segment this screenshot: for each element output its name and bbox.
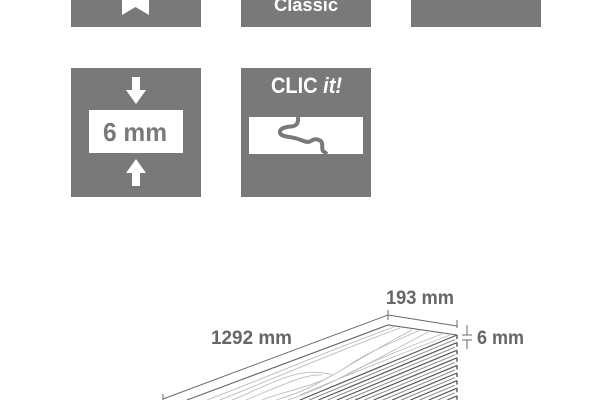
label: 6 mm: 6 mm [477, 328, 524, 349]
dimension: width line [388, 310, 457, 328]
icon: bookmark tile [71, 0, 201, 27]
label: 1292 mm: 1292 mm [211, 328, 292, 349]
plank dimension drawing [163, 288, 524, 400]
dimension: length line [163, 315, 388, 400]
label: 193 mm: 193 mm [386, 288, 454, 309]
icon: CLIC it tile [241, 68, 371, 197]
dimension: thickness marks [462, 325, 472, 349]
icon: 6 mm thickness tile [71, 68, 201, 197]
icon: Classic tile [241, 0, 371, 27]
plank top face [187, 325, 457, 400]
icon: blank cropped tile [411, 0, 541, 27]
plank front face grooves [300, 335, 457, 400]
icon: CLIC it tile: CLIC it! [271, 73, 342, 98]
icon: 6 mm thickness tile: 6 mm [103, 117, 167, 147]
